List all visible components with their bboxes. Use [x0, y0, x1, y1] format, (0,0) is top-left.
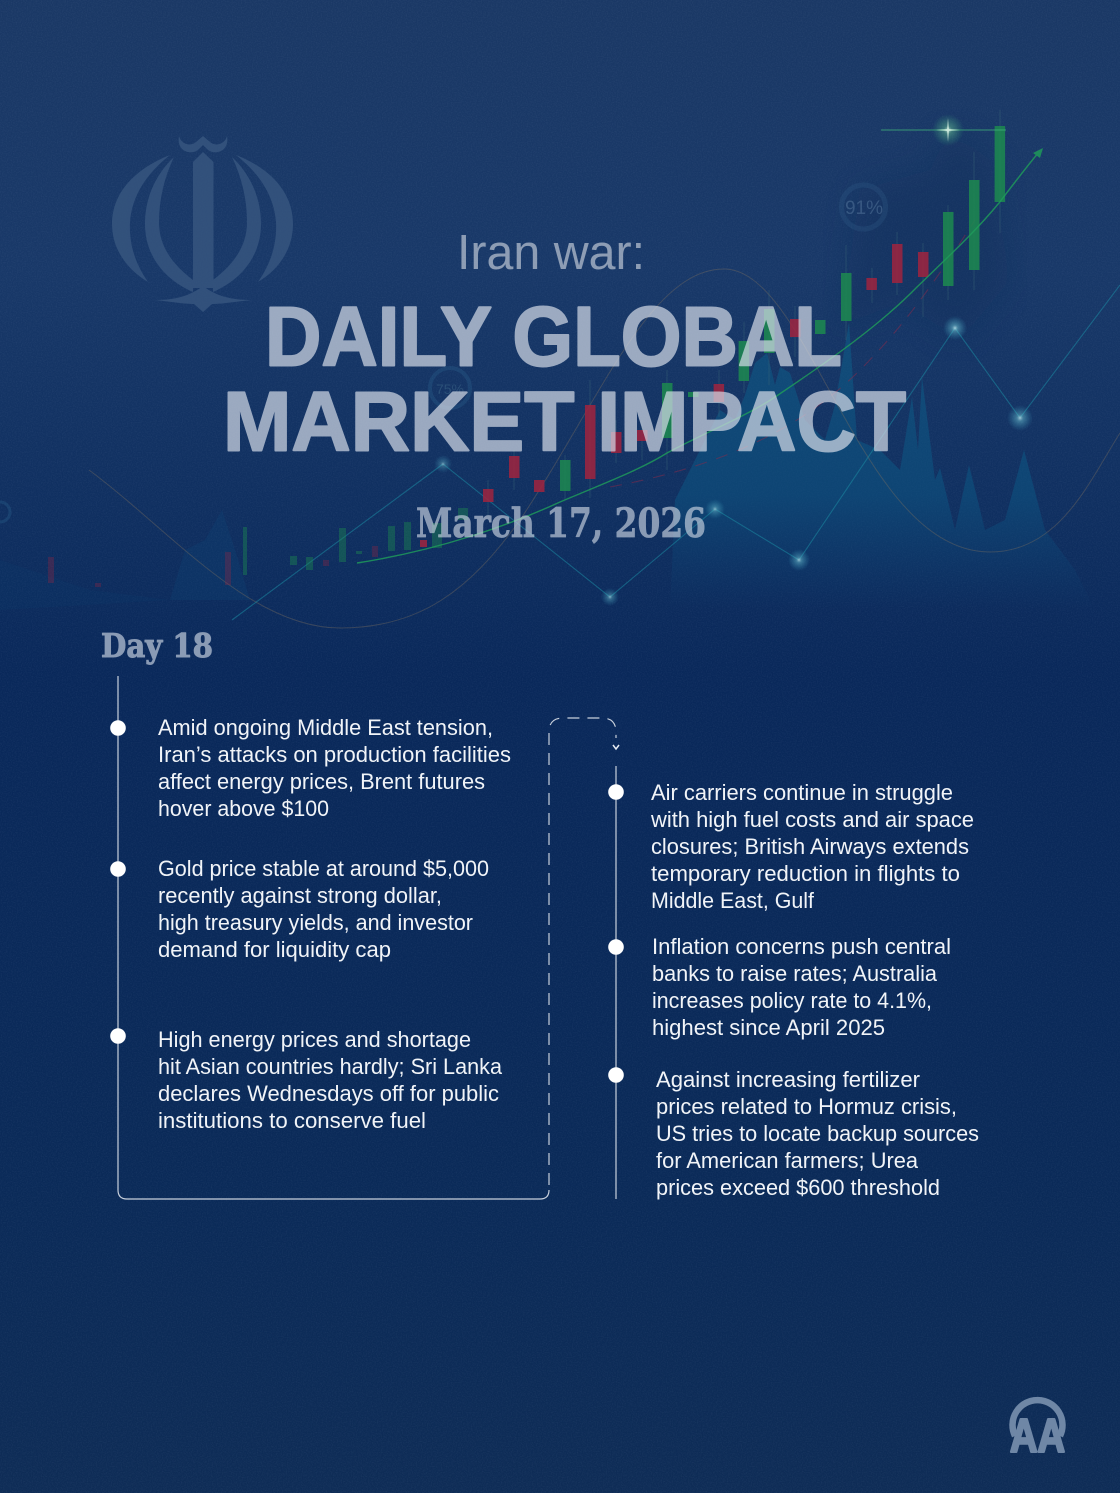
text block: inflation: increases policy rate to 4.1%,	[652, 988, 932, 1013]
text block: Brent futures: Amid ongoing Middle East tension,	[158, 715, 493, 740]
text block: gold price: high treasury yields, and investor	[158, 910, 473, 935]
icon: Iran emblem	[112, 136, 293, 312]
chart: red candlesticks	[420, 244, 928, 547]
heading: Day 18: Day 18	[101, 626, 213, 665]
text block: air carriers: Middle East, Gulf	[651, 888, 815, 913]
text block: Brent futures: affect energy prices, Brent futures	[158, 769, 485, 794]
text block: air carriers: Air carriers continue in struggle	[651, 780, 953, 805]
gauge: 75%	[430, 368, 470, 408]
text block: inflation: Inflation concerns push central	[652, 934, 951, 959]
text block: gold price	[158, 856, 489, 962]
text block: Asian countries: High energy prices and shortage	[158, 1027, 471, 1052]
title: DAILY GLOBAL	[265, 290, 842, 384]
title	[223, 290, 906, 468]
chart: brown sine curve	[89, 269, 1120, 628]
text block: inflation: banks to raise rates; Australia	[652, 961, 938, 986]
gauge: 91%: 91%	[845, 198, 883, 219]
text block: Brent futures: Iran’s attacks on production facilities	[158, 742, 511, 767]
text block: fertilizer: prices exceed $600 threshold	[656, 1175, 940, 1200]
text block: Brent futures: hover above $100	[158, 796, 329, 821]
gauge: faint left	[0, 502, 10, 522]
timeline: right line	[615, 766, 617, 1199]
text block: Brent futures	[158, 715, 511, 821]
text block: fertilizer: for American farmers; Urea	[656, 1148, 919, 1173]
text block: inflation	[652, 934, 951, 1040]
chart: green star glare	[881, 114, 1006, 146]
text block: fertilizer: Against increasing fertilizer	[656, 1067, 920, 1092]
chart: blue area mountains	[0, 323, 1095, 610]
chart: teal zigzag line with nodes	[232, 285, 1120, 620]
text block: air carriers: temporary reduction in flights to	[651, 861, 960, 886]
text block: Asian countries: declares Wednesdays off for public	[158, 1081, 499, 1106]
chart: faint left candlesticks	[48, 508, 468, 587]
chart: candlestick wicks	[488, 110, 1000, 515]
text block: inflation: highest since April 2025	[652, 1015, 885, 1040]
title: MARKET IMPACT	[223, 374, 906, 468]
gauge: 91%	[842, 185, 886, 229]
timeline: dashed connector	[549, 718, 616, 1185]
date: March 17, 2026	[416, 500, 706, 547]
gauge: 75%: 75%	[436, 381, 464, 397]
text block: fertilizer	[656, 1067, 979, 1200]
chart: dark silhouette	[840, 130, 1010, 340]
chart: green trend arrow	[357, 148, 1043, 563]
text block: air carriers: closures; British Airways extends	[651, 834, 969, 859]
text block: air carriers	[650, 780, 974, 913]
logo: Anadolu Agency: AA	[1010, 1409, 1065, 1462]
icon: chevron	[613, 745, 619, 749]
text block: fertilizer: prices related to Hormuz crisis,	[656, 1094, 957, 1119]
text block: Asian countries: hit Asian countries hardly; Sri Lanka	[158, 1054, 503, 1079]
text block: fertilizer: US tries to locate backup sources	[656, 1121, 979, 1146]
timeline dots	[110, 720, 624, 1083]
timeline: left solid connector	[118, 676, 549, 1199]
chart: red dashed trend	[610, 220, 975, 487]
text block: Asian countries	[158, 1027, 503, 1133]
chart: green candlesticks	[560, 126, 1005, 491]
text block: gold price: recently against strong dollar,	[158, 883, 442, 908]
text block: gold price: demand for liquidity cap	[158, 937, 391, 962]
subtitle: Iran war: Iran war:	[457, 226, 645, 280]
text block: Asian countries: institutions to conserve fuel	[158, 1108, 426, 1133]
text block: air carriers: with high fuel costs and air space	[650, 807, 974, 832]
text block: gold price: Gold price stable at around $5,000	[158, 856, 489, 881]
